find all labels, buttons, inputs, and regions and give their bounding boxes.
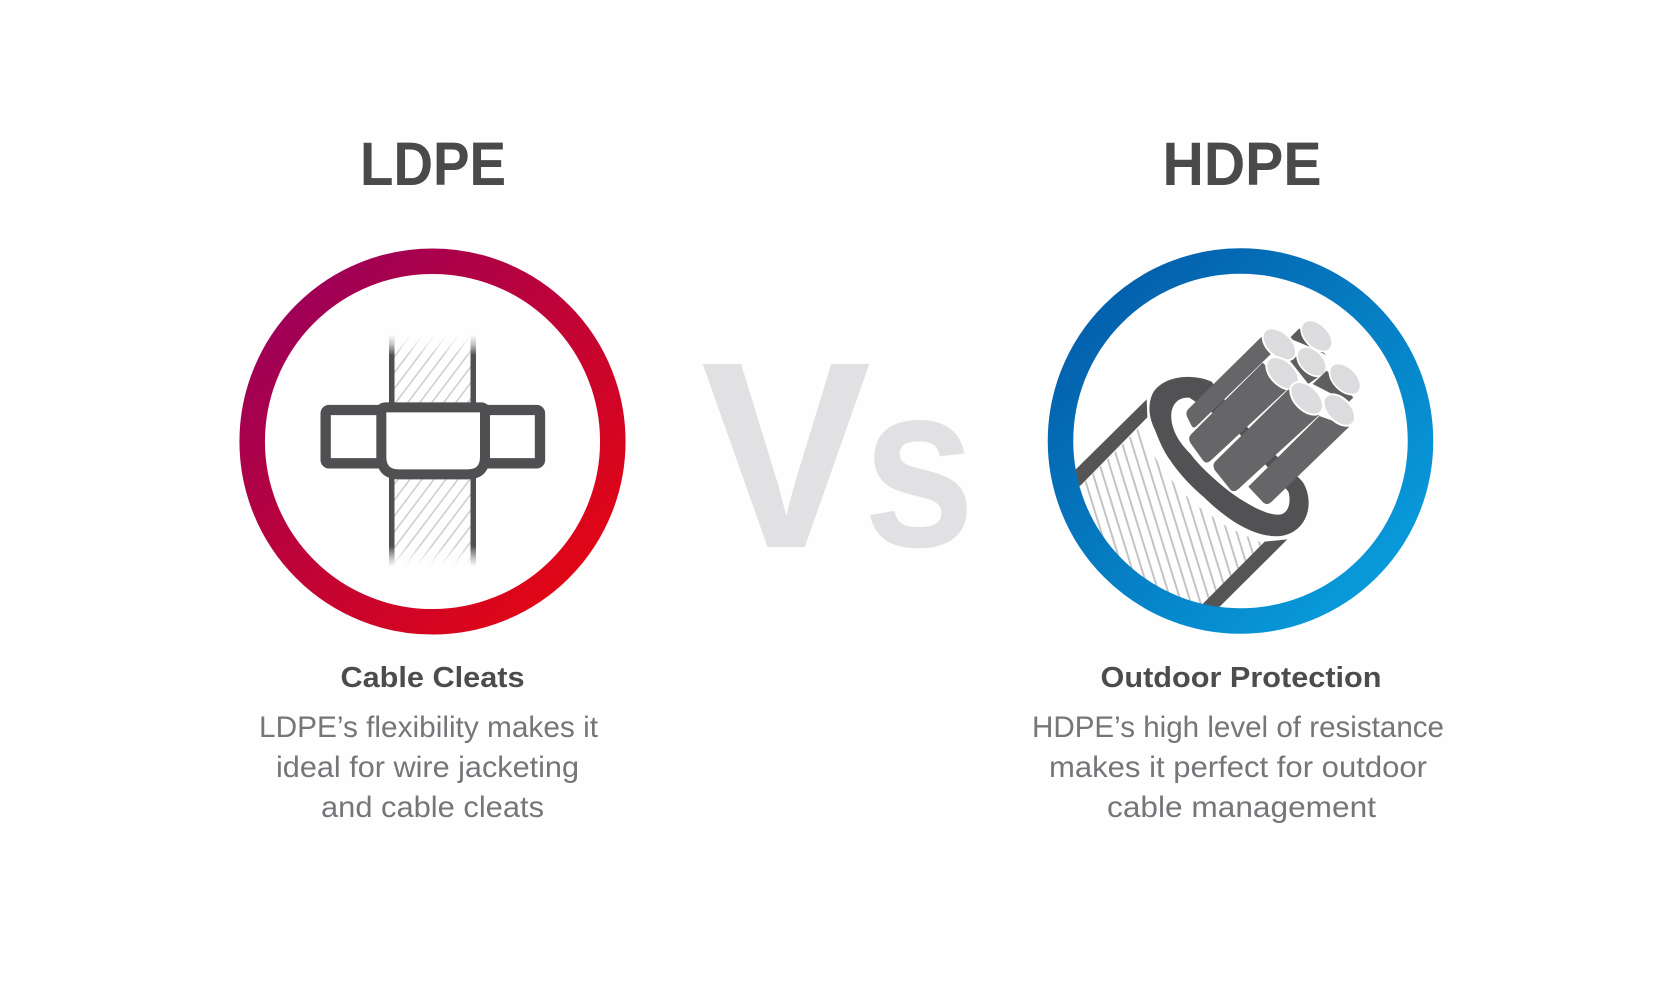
icon: cable cleat <box>326 330 540 570</box>
ring: LDPE red gradient <box>252 261 613 622</box>
HDPE description: HDPE’s high level of resistance <box>1032 711 1444 744</box>
HDPE description <box>1032 711 1444 824</box>
LDPE description <box>259 711 599 824</box>
LDPE description: ideal for wire jacketing <box>276 751 579 784</box>
HDPE subheading: Outdoor Protection <box>1100 662 1382 694</box>
front conductors <box>1186 322 1361 504</box>
lower sheath band <box>1202 539 1287 608</box>
rear conductors <box>1290 321 1360 402</box>
Vs watermark <box>701 307 975 604</box>
dark sheath ring <box>1149 377 1309 536</box>
upper sheath band <box>1076 400 1148 486</box>
cleat body <box>326 407 540 474</box>
HDPE description: cable management <box>1107 791 1377 824</box>
hatched insulation <box>1084 428 1261 604</box>
Vs watermark: V <box>701 307 872 604</box>
LDPE subheading: Cable Cleats <box>340 662 524 694</box>
heading: LDPE: LDPE <box>360 130 506 198</box>
cable with hatching <box>389 330 476 570</box>
LDPE description: and cable cleats <box>321 791 544 824</box>
HDPE description: makes it perfect for outdoor <box>1049 751 1427 784</box>
ring: HDPE blue gradient <box>1060 261 1420 621</box>
LDPE description: LDPE’s flexibility makes it <box>259 711 599 744</box>
icon: cable cross-section <box>1050 315 1366 630</box>
Vs watermark: s <box>863 334 975 596</box>
white inner gap <box>1171 398 1290 515</box>
heading: HDPE: HDPE <box>1162 130 1322 198</box>
